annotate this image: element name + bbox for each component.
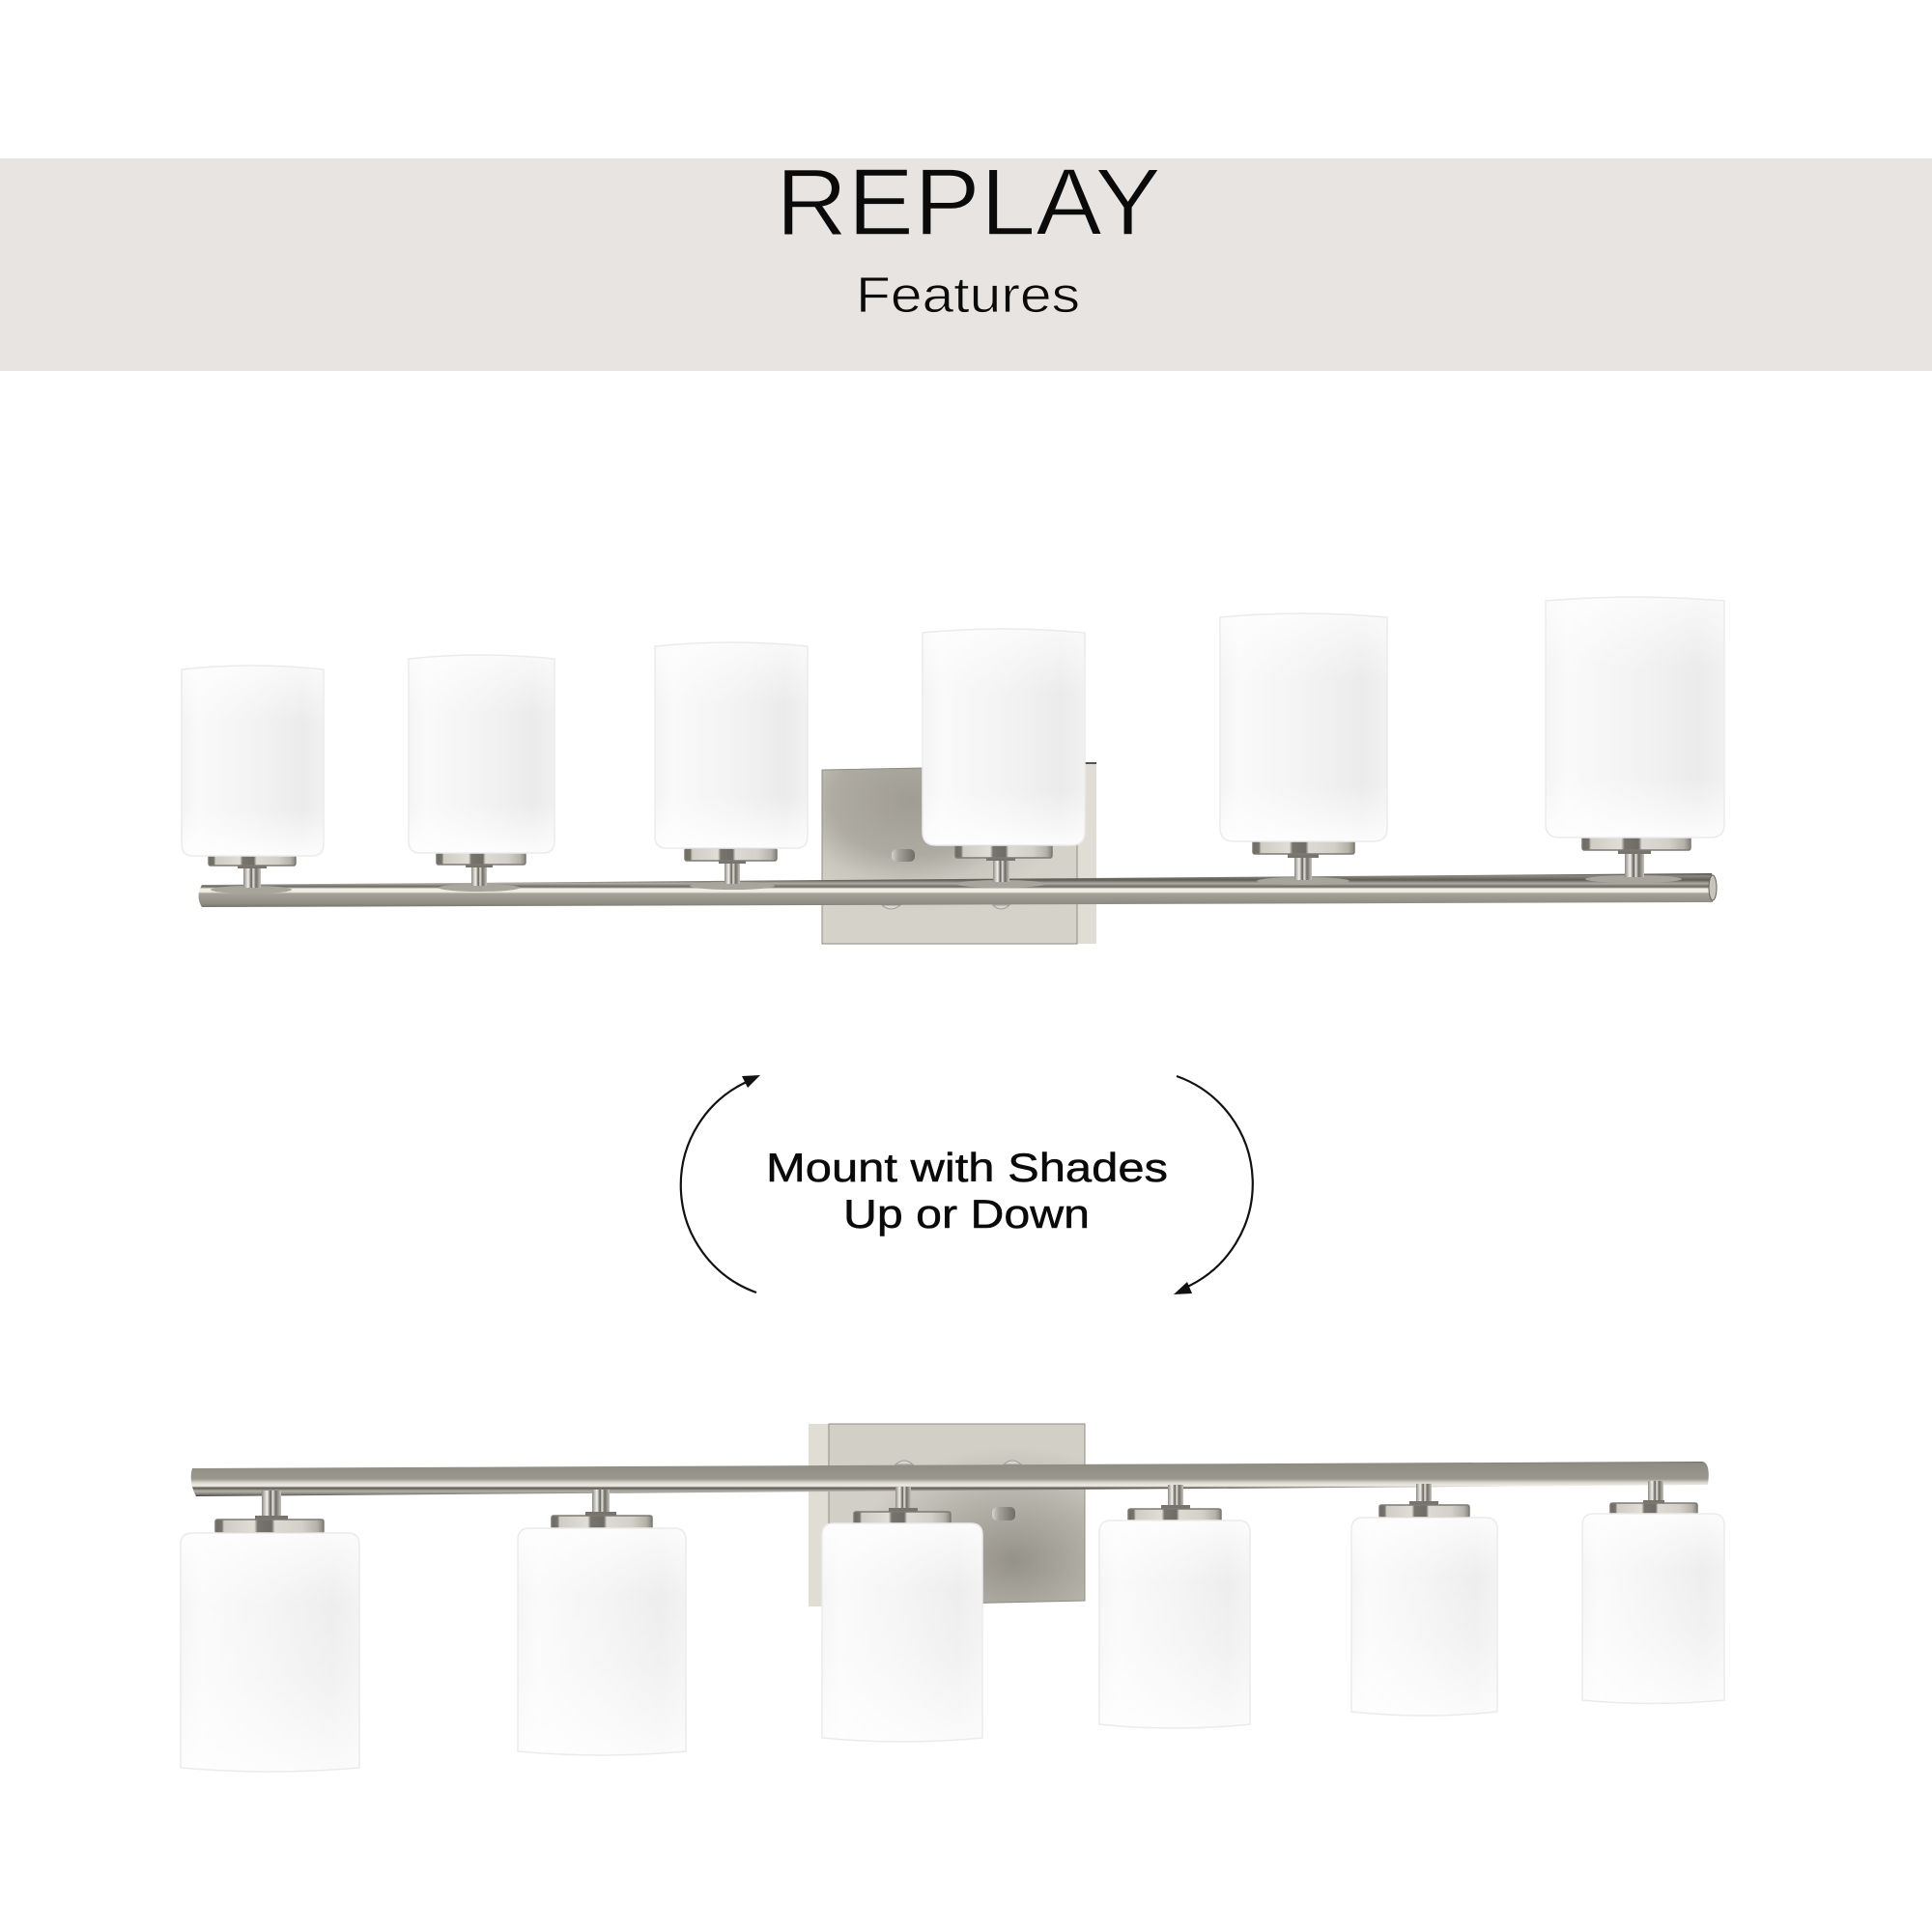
- glass shade 5: [1351, 1518, 1497, 1716]
- rotation callout: [681, 1075, 1253, 1294]
- glass shade 4: [923, 629, 1085, 845]
- glass shade 4: [1099, 1520, 1250, 1728]
- glass shade 2: [518, 1528, 686, 1755]
- glass shade 2: [409, 655, 554, 853]
- glass shade 5: [1220, 613, 1387, 841]
- glass shade 1: [182, 666, 324, 856]
- callout text: [766, 1145, 1168, 1236]
- arrow: right arc pointing down: [1174, 1076, 1253, 1294]
- horizontal bar: [191, 1462, 1709, 1496]
- backplate: [822, 762, 1096, 944]
- bottom fixture: shades down: [181, 1424, 1724, 1772]
- arrow: left arc pointing up: [681, 1075, 760, 1293]
- stems and caps: [209, 836, 1690, 888]
- callout text: Up or Down: [843, 1191, 1090, 1236]
- callout text: Mount with Shades: [766, 1145, 1168, 1190]
- glass shade 6: [1546, 597, 1724, 838]
- glass shade 6: [1582, 1514, 1724, 1704]
- stems and caps: [215, 1481, 1697, 1533]
- top fixture: shades up: [182, 597, 1724, 944]
- header banner: [0, 149, 1932, 371]
- glass shade 3: [655, 642, 808, 848]
- backplate: [809, 1424, 1085, 1606]
- glass shade 3: [822, 1523, 982, 1742]
- glass shade 1: [181, 1533, 359, 1772]
- subtitle: Features: [856, 268, 1080, 324]
- horizontal bar: [199, 873, 1717, 907]
- title: REPLAY: [776, 149, 1161, 255]
